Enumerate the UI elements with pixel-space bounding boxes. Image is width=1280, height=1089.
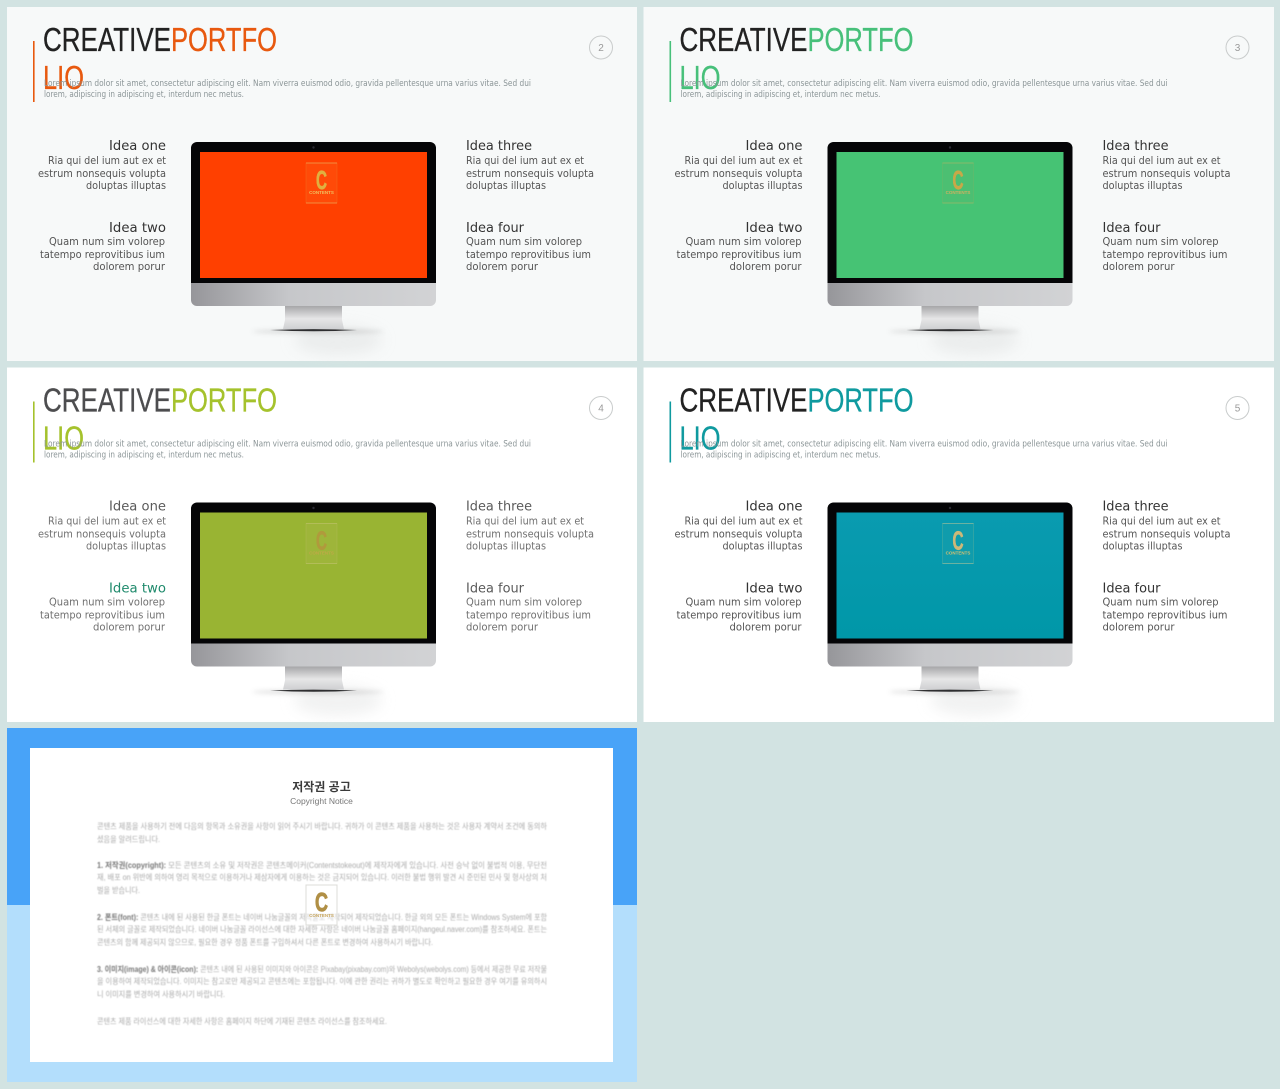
heading: copyright notice: 저작권 공고	[292, 779, 351, 794]
description: Lorem ipsum dolor sit amet, consectetur adipiscing elit. Nam viverra euismod odio, gravida pellentesque urna varius vitae. Sed dui	[680, 440, 1168, 450]
text: idea one: doluptas illuptas	[722, 179, 803, 192]
description: lorem, adipiscing in adipiscing et, interdum nec metus.	[680, 90, 880, 100]
text: idea three	[1102, 138, 1230, 192]
title	[680, 21, 914, 96]
panel: copyright notice slide	[7, 728, 637, 1082]
text: idea three	[466, 498, 594, 552]
text: idea four: dolorem porur	[1102, 260, 1175, 273]
text: idea four	[466, 580, 591, 634]
text: idea one: estrum nonsequis volupta	[674, 528, 802, 540]
text: idea three: doluptas illuptas	[1102, 179, 1183, 192]
logo: CONTENTS	[946, 190, 970, 195]
title: PORTFO	[171, 382, 277, 418]
page number: 2	[598, 43, 604, 54]
title	[680, 382, 914, 456]
description: Lorem ipsum dolor sit amet, consectetur adipiscing elit. Nam viverra euismod odio, gravida pellentesque urna varius vitae. Sed dui	[680, 79, 1168, 89]
description	[680, 79, 1168, 100]
text: idea three: estrum nonsequis volupta	[1102, 528, 1230, 540]
accent bar	[670, 41, 671, 102]
description: lorem, adipiscing in adipiscing et, interdum nec metus.	[44, 450, 244, 460]
logo: gold C badge: C	[315, 887, 328, 917]
text: idea three: Ria qui del ium aut ex et	[466, 514, 585, 528]
text: idea two: tatempo reprovitibus ium	[40, 248, 165, 261]
description	[680, 440, 1168, 460]
title: LIO	[43, 59, 84, 96]
text block: copyright body	[97, 821, 548, 1026]
text: idea one: doluptas illuptas	[86, 540, 166, 552]
description: Lorem ipsum dolor sit amet, consectetur adipiscing elit. Nam viverra euismod odio, gravida pellentesque urna varius vitae. Sed dui	[44, 440, 531, 450]
text: idea four: Quam num sim volorep	[466, 596, 582, 608]
text: idea four: Quam num sim volorep	[1102, 235, 1219, 248]
text: idea three: estrum nonsequis volupta	[1102, 167, 1230, 180]
title: PORTFO	[171, 21, 277, 58]
text: idea two: Idea two	[109, 580, 166, 596]
title	[43, 382, 277, 456]
text: idea one: Ria qui del ium aut ex et	[48, 154, 167, 167]
monitor	[828, 502, 1072, 716]
text: idea three: estrum nonsequis volupta	[466, 167, 594, 180]
text block: copyright body: 콘텐츠 제품을 사용하기 전에 다음의 항목과 소유권을 사항이 읽어 주시기 바랍니다. 귀하가 이 콘텐츠 제품을 사용하는 것은 사용자 계약서 조건에 동의하	[97, 821, 548, 831]
text: idea two: tatempo reprovitibus ium	[676, 608, 802, 622]
text: idea four: tatempo reprovitibus ium	[466, 608, 591, 622]
text: idea one: estrum nonsequis volupta	[38, 167, 166, 180]
text: idea three: Idea three	[1102, 138, 1168, 154]
description	[44, 79, 531, 100]
page number: 4	[598, 404, 604, 414]
text: idea two: tatempo reprovitibus ium	[676, 248, 802, 261]
text: idea two: Idea two	[109, 220, 166, 236]
text: idea one: Idea one	[109, 498, 166, 514]
text block: copyright body: 3. 이미지(image) & 아이콘(icon): 콘텐츠 내에 된 사용된 이미지와 아이콘은 Pixabay(pixabay.com)와 Webolys(webolys.com) 등에서 제공한 무료 저작물	[97, 964, 547, 974]
monitor	[828, 142, 1072, 355]
text: idea two	[676, 220, 802, 273]
text: idea three: estrum nonsequis volupta	[466, 528, 594, 540]
title: CREATIVE	[43, 21, 171, 58]
text: idea four	[1102, 580, 1228, 634]
panel: slide 3 green	[644, 7, 1274, 361]
panel: slide 2 orange	[7, 7, 637, 361]
text block: copyright body: 재, 배포 on 위반에 의하여 영리 목적으로 이용하거나 제삼자에게 이용하는 것은 금지되어 있습니다. 이러한 불법 행위 발견 시 준민된 민사 및 형사상의 처	[97, 872, 547, 882]
logo	[306, 163, 337, 203]
text: idea two	[40, 580, 166, 634]
text: idea two: Quam num sim volorep	[49, 235, 165, 248]
text: idea four: dolorem porur	[1102, 620, 1175, 634]
text: idea three: Ria qui del ium aut ex et	[466, 154, 585, 167]
text: idea four: Quam num sim volorep	[1102, 596, 1219, 608]
text: idea four: tatempo reprovitibus ium	[1102, 608, 1228, 622]
page number	[590, 36, 612, 59]
page number	[1226, 36, 1249, 59]
text: idea two: Quam num sim volorep	[686, 235, 802, 248]
text: idea one: doluptas illuptas	[722, 540, 803, 552]
text block: copyright body: 을 이용하여 제작되었습니다. 이미지는 참고로만 제공되고 콘텐츠에는 포함됩니다. 이에 관한 권리는 귀하가 별도로 확인하고 필요한 경우 여기를 유의하시	[97, 976, 547, 986]
logo: C	[952, 526, 964, 556]
heading: copyright notice: Copyright Notice	[290, 796, 353, 806]
title: PORTFO	[808, 21, 914, 58]
text: idea one: Ria qui del ium aut ex et	[48, 514, 167, 528]
text: idea one: doluptas illuptas	[86, 179, 166, 192]
text: idea one	[674, 138, 803, 192]
text block: copyright body: 된 서체의 글꼴로 제작되었습니다. 네이버 나눔글꼴 라이선스에 대한 자세한 사항은 네이버 나눔글꼴 홈페이지(hangeul.naver.com)를 참조하세요. 폰트는	[97, 924, 547, 934]
text: idea three: Ria qui del ium aut ex et	[1102, 154, 1221, 167]
text: idea two: Idea two	[746, 580, 802, 596]
title: PORTFO	[808, 382, 914, 418]
text: idea three: Ria qui del ium aut ex et	[1102, 514, 1221, 528]
panel: slide 5 teal	[644, 368, 1274, 722]
text: idea four: Idea four	[1102, 580, 1161, 596]
text: idea two	[40, 220, 166, 273]
description: lorem, adipiscing in adipiscing et, interdum nec metus.	[44, 90, 244, 100]
heading: copyright notice	[290, 779, 353, 806]
text block: copyright body: 1. 저작권(copyright): 모든 콘텐츠의 소유 및 저작권은 콘텐츠메이커(Contentstokeout)에 제작자에게 있습니다. 사전 승낙 없이 불법적 이용, 무단전	[97, 860, 547, 870]
text: idea one	[38, 138, 167, 192]
text: idea three: doluptas illuptas	[1102, 540, 1183, 552]
title: LIO	[43, 420, 84, 456]
page number: 5	[1235, 404, 1241, 414]
text: idea one: Ria qui del ium aut ex et	[684, 514, 803, 528]
text: idea two: dolorem porur	[93, 260, 165, 273]
title: LIO	[680, 59, 720, 96]
text: idea one: estrum nonsequis volupta	[38, 528, 166, 540]
description: lorem, adipiscing in adipiscing et, interdum nec metus.	[680, 450, 880, 460]
accent bar	[33, 41, 35, 102]
text: idea three: doluptas illuptas	[466, 179, 546, 192]
title: LIO	[680, 420, 720, 456]
title	[43, 21, 277, 96]
logo	[942, 163, 974, 203]
logo: C	[316, 526, 327, 556]
text: idea four: dolorem porur	[466, 260, 538, 273]
text: idea four: dolorem porur	[466, 620, 538, 634]
page number	[1226, 396, 1249, 420]
accent bar	[33, 402, 35, 462]
text: idea four	[466, 220, 591, 273]
monitor	[191, 502, 436, 716]
text: idea two: Quam num sim volorep	[49, 596, 165, 608]
text: idea two: Quam num sim volorep	[686, 596, 802, 608]
panel: slide 4 lime	[7, 368, 637, 722]
title: CREATIVE	[680, 21, 808, 58]
description	[44, 440, 531, 460]
text: idea four	[1102, 220, 1228, 273]
text block: copyright body: 니 이미지를 변경하여 사용하시기 바랍니다.	[97, 989, 225, 999]
description: Lorem ipsum dolor sit amet, consectetur adipiscing elit. Nam viverra euismod odio, gravida pellentesque urna varius vitae. Sed dui	[44, 79, 531, 89]
text: idea two: Idea two	[746, 220, 802, 236]
page number: 3	[1235, 43, 1241, 54]
text: idea one: Idea one	[746, 498, 802, 514]
text block: copyright body: 콘텐츠 제품 라이선스에 대한 자세한 사항은 홈페이지 하단에 기재된 콘텐츠 라이선스를 참조하세요.	[97, 1016, 387, 1026]
text: idea one: Idea one	[746, 138, 802, 154]
text: idea one	[38, 498, 167, 552]
logo: CONTENTS	[309, 190, 334, 195]
accent bar	[670, 402, 671, 462]
logo: CONTENTS	[946, 550, 970, 556]
logo	[306, 524, 337, 564]
text: idea four: tatempo reprovitibus ium	[1102, 248, 1228, 261]
text: idea two	[676, 580, 802, 634]
text: idea two: dolorem porur	[730, 260, 802, 273]
text: idea three: doluptas illuptas	[466, 540, 546, 552]
text: idea one: Ria qui del ium aut ex et	[684, 154, 803, 167]
page number	[590, 396, 612, 420]
text: idea four: Idea four	[466, 220, 524, 236]
logo: C	[316, 165, 327, 195]
text: idea one: Idea one	[109, 138, 166, 154]
monitor	[191, 142, 436, 355]
text: idea four: tatempo reprovitibus ium	[466, 248, 591, 261]
text block: copyright body: 콘텐츠의 함께 제공되지 않으므로, 필요한 경우 정품 폰트를 구입하셔서 다른 폰트로 변경하여 사용하시기 바랍니다.	[97, 937, 433, 947]
text: idea one: estrum nonsequis volupta	[674, 167, 802, 180]
logo: gold C badge	[306, 885, 337, 925]
text: idea four: Idea four	[466, 580, 524, 596]
text: idea three: Idea three	[466, 498, 532, 514]
text: idea two: dolorem porur	[730, 620, 802, 634]
title: CREATIVE	[680, 382, 808, 418]
text: idea three: Idea three	[466, 138, 532, 154]
text: idea two: dolorem porur	[93, 620, 165, 634]
text: idea one	[674, 498, 803, 552]
logo: C	[952, 165, 964, 195]
text block: copyright body: 2. 폰트(font): 콘텐츠 내에 된 사용된 한글 폰트는 네이버 나눔글꼴의 저작물로 제작되어 제작되었습니다. 한글 외의 모든 폰트는 Windows System에 포함	[97, 912, 548, 922]
text: idea three	[1102, 498, 1230, 552]
text: idea three: Idea three	[1102, 498, 1168, 514]
title: CREATIVE	[43, 382, 171, 418]
logo	[942, 524, 974, 564]
text block: copyright body: 벌을 받습니다.	[97, 885, 140, 895]
text: idea two: tatempo reprovitibus ium	[40, 608, 165, 622]
logo: CONTENTS	[309, 550, 334, 556]
logo: gold C badge: CONTENTS	[309, 913, 334, 918]
text: idea three	[466, 138, 594, 192]
text block: copyright body: 셨음을 알려드립니다.	[97, 834, 160, 844]
text: idea four: Quam num sim volorep	[466, 235, 582, 248]
text: idea four: Idea four	[1102, 220, 1161, 236]
